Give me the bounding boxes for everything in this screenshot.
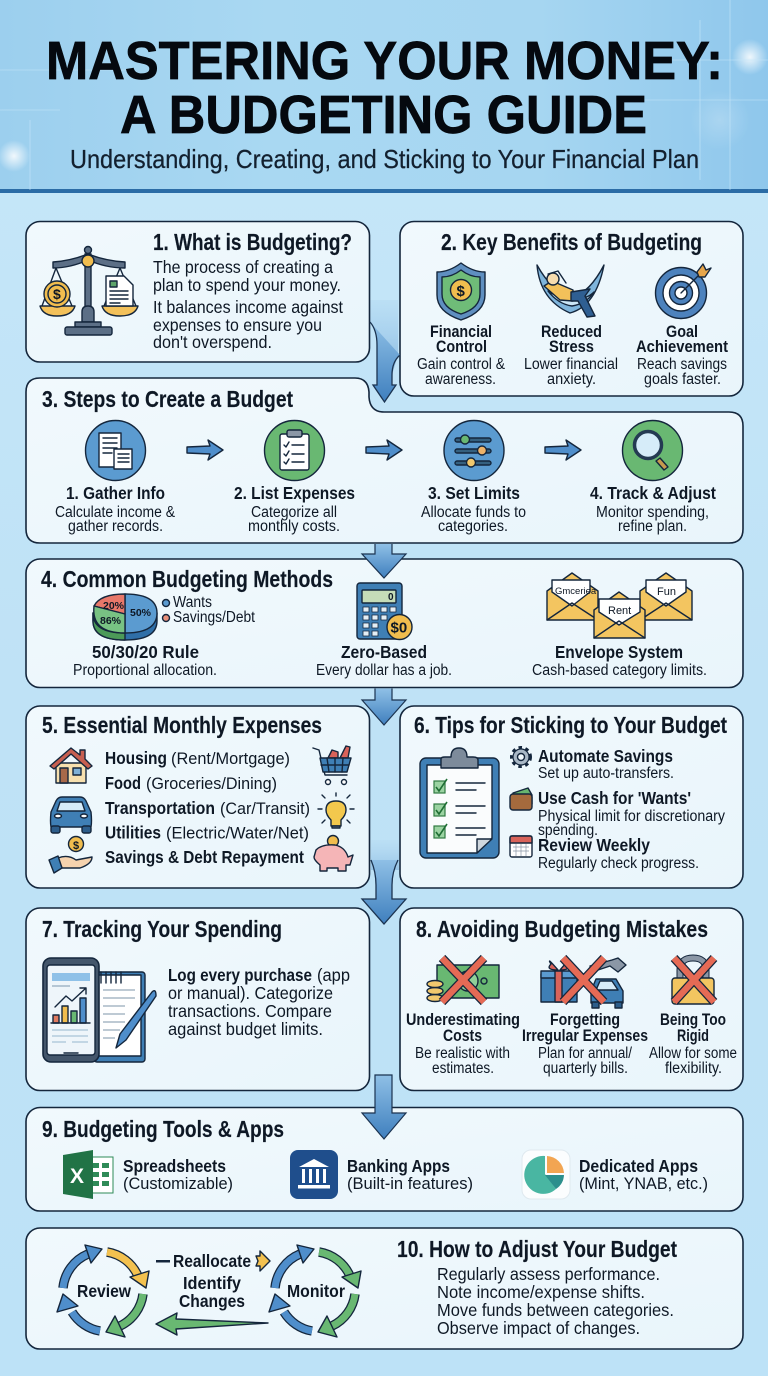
text block: It balances income against <box>153 297 343 317</box>
text block: (app <box>317 965 350 985</box>
text block: or manual). Categorize <box>168 983 333 1003</box>
benefit: reduced stress: Reduced <box>541 322 602 341</box>
mistake: forgetting irregular: quarterly bills. <box>543 1060 628 1077</box>
heading: 8. Avoiding Budgeting Mistakes <box>416 916 708 942</box>
icon: hammock <box>537 265 604 317</box>
connector swoosh: gap above arrow 5-6 to 7-8 <box>371 840 399 870</box>
mistake: underestimating: Costs <box>443 1026 482 1045</box>
benefit: financial control: awareness. <box>425 371 496 388</box>
title: A BUDGETING GUIDE <box>120 85 647 145</box>
icon: wallet <box>510 788 532 810</box>
icon: crossed-out padlock <box>672 958 714 1004</box>
tool: dedicated apps: Dedicated Apps <box>579 1156 698 1176</box>
panel: tips for sticking <box>400 706 743 888</box>
subtitle: Understanding, Creating, and Sticking to Your Financial Plan <box>70 144 699 174</box>
icon: clipboard <box>420 748 499 858</box>
icon: review cycle: Review <box>77 1281 131 1301</box>
icon: shield <box>437 263 485 320</box>
tip: automate savings <box>538 746 674 782</box>
benefit: reduced stress: anxiety. <box>547 371 596 388</box>
expense rows <box>105 748 310 867</box>
label: identify changes: Changes <box>179 1291 245 1311</box>
title <box>46 31 723 145</box>
icon: piggy bank <box>314 836 353 871</box>
benefit: financial control: Financial <box>430 322 492 341</box>
heading: 9. Budgeting Tools & Apps <box>42 1116 284 1142</box>
method: envelope system: Envelope System <box>555 642 683 662</box>
panel: tracking your spending <box>26 908 370 1090</box>
text block: Observe impact of changes. <box>437 1318 640 1338</box>
step: set limits: categories. <box>438 518 508 535</box>
method: envelope system <box>532 642 707 679</box>
text block: Move funds between categories. <box>437 1300 674 1320</box>
tip: review weekly: Review Weekly <box>538 835 650 855</box>
benefit: goal achievement: Goal <box>666 322 698 341</box>
step: track and adjust: Monitor spending, <box>596 504 709 521</box>
icon: crossed-out money <box>427 958 499 1002</box>
arrow: methods to expenses <box>362 688 406 725</box>
icon: spreadsheet: X <box>70 1165 84 1188</box>
icon: review cycle <box>57 1245 149 1337</box>
mistake: too rigid <box>649 1010 737 1077</box>
mistake: underestimating: Be realistic with <box>415 1045 510 1062</box>
expense rows: Savings & Debt Repayment <box>105 847 304 867</box>
benefit: financial control: Control <box>436 337 487 356</box>
icon: house <box>50 748 92 783</box>
mistake: underestimating: estimates. <box>432 1060 494 1077</box>
panel: common budgeting methods <box>26 559 743 688</box>
step: gather info <box>55 483 176 535</box>
expense rows: Transportation <box>105 798 215 818</box>
step: list expenses: monthly costs. <box>248 518 340 535</box>
panel: avoiding mistakes <box>400 908 743 1090</box>
step arrow <box>545 440 581 460</box>
method: zero-based: Zero-Based <box>341 642 427 662</box>
heading: 10. How to Adjust Your Budget <box>397 1236 677 1262</box>
method: envelope system: Cash-based category limits. <box>532 662 707 679</box>
text block <box>153 257 343 352</box>
arrow: monitor back to review <box>156 1313 268 1335</box>
text block <box>437 1264 674 1338</box>
panel: what is budgeting <box>26 222 370 362</box>
mistake: forgetting irregular: Plan for annual/ <box>538 1045 633 1062</box>
method: 50/30/20: 50/30/20 Rule <box>92 642 199 662</box>
connector swoosh: sections 1-2 to 3 <box>370 300 398 385</box>
tool: spreadsheets: Spreadsheets <box>123 1156 226 1176</box>
icon: bank <box>290 1150 338 1199</box>
step: track and adjust: refine plan. <box>618 518 687 535</box>
method: zero-based <box>316 642 452 679</box>
tool: spreadsheets <box>123 1156 233 1193</box>
icon: dedicated app <box>522 1150 570 1199</box>
benefit: reduced stress <box>524 322 618 388</box>
benefit: goal achievement: Achievement <box>636 337 728 356</box>
text block: Note income/expense shifts. <box>437 1282 645 1302</box>
expense rows: (Groceries/Dining) <box>146 774 277 793</box>
benefit: reduced stress: Stress <box>549 337 594 356</box>
mistake: underestimating: Underestimating <box>406 1010 520 1029</box>
icon: pie chart <box>93 594 157 640</box>
mistake: forgetting irregular: Irregular Expenses <box>522 1026 648 1045</box>
icon: envelopes: Gmceriea <box>555 586 597 597</box>
heading: 2. Key Benefits of Budgeting <box>441 229 702 255</box>
icon: calculator <box>357 583 412 640</box>
mistake: too rigid: Allow for some <box>649 1045 737 1062</box>
step: set limits: 3. Set Limits <box>428 483 520 503</box>
icon: calendar <box>510 836 532 857</box>
expense rows: (Electric/Water/Net) <box>166 824 309 842</box>
heading: 1. What is Budgeting? <box>153 229 352 255</box>
icon: track and adjust <box>622 420 682 480</box>
icon: balance scale <box>40 246 138 335</box>
arrow: steps to methods <box>362 544 406 578</box>
step: gather info: Calculate income & <box>55 504 176 521</box>
icon: calculator: 0 <box>388 592 394 603</box>
expense rows: (Rent/Mortgage) <box>171 749 290 768</box>
icon: hand with coin: $ <box>73 840 79 852</box>
text block: Log every purchase <box>168 965 312 985</box>
benefit: goal achievement <box>636 322 728 388</box>
heading: 4. Common Budgeting Methods <box>41 566 333 592</box>
tip: use cash: spending. <box>538 822 598 839</box>
label: reallocate: Reallocate <box>173 1251 251 1271</box>
legend <box>162 594 256 626</box>
tip: review weekly: Regularly check progress. <box>538 855 699 872</box>
text block: expenses to ensure you <box>153 315 322 335</box>
icon: calculator: $0 <box>390 620 407 636</box>
step: track and adjust: 4. Track & Adjust <box>590 483 716 503</box>
tip: automate savings: Set up auto-transfers. <box>538 765 674 782</box>
legend: Savings/Debt <box>173 609 256 626</box>
tip: review weekly <box>538 835 699 872</box>
step: set limits <box>421 483 526 535</box>
panel: essential monthly expenses <box>26 706 370 888</box>
tool: banking apps: Banking Apps <box>347 1156 450 1176</box>
icon: pie chart: 50% <box>130 607 152 619</box>
mistake: underestimating <box>406 1010 520 1077</box>
arrow: tracking to tools <box>362 1075 406 1139</box>
panel: key benefits <box>400 222 743 396</box>
method: zero-based: Every dollar has a job. <box>316 662 452 679</box>
legend: Wants <box>173 594 212 611</box>
benefit: goal achievement: Reach savings <box>637 356 727 373</box>
arrow: expenses to tracking <box>362 860 406 924</box>
icon: pie chart: 86% <box>100 615 122 627</box>
header banner <box>0 0 768 193</box>
tool: dedicated apps: (Mint, YNAB, etc.) <box>579 1174 708 1193</box>
method: 50/30/20 <box>73 642 217 679</box>
label: identify changes: Identify <box>183 1273 241 1293</box>
mistake: too rigid: Being Too <box>660 1010 726 1029</box>
icon: monitor cycle: Monitor <box>287 1281 345 1301</box>
label: identify changes <box>179 1273 245 1311</box>
icon: light bulb <box>318 793 354 828</box>
tool: spreadsheets: (Customizable) <box>123 1174 233 1193</box>
benefit: financial control: Gain control & <box>417 356 506 373</box>
expense rows: (Car/Transit) <box>220 799 310 818</box>
mistake: too rigid: flexibility. <box>665 1060 722 1077</box>
step: list expenses: 2. List Expenses <box>234 483 355 503</box>
icon: envelopes <box>547 573 692 638</box>
tip: use cash <box>538 788 725 839</box>
tip: use cash: Use Cash for 'Wants' <box>538 788 691 808</box>
step arrow <box>187 440 223 460</box>
expense rows: Food <box>105 773 141 793</box>
tool: banking apps <box>347 1156 473 1193</box>
panel: steps to create a budget <box>26 378 743 543</box>
mistake: forgetting irregular <box>522 1010 648 1077</box>
icon: envelopes: Rent <box>608 605 631 617</box>
heading: 5. Essential Monthly Expenses <box>42 712 322 738</box>
icon: spreadsheet <box>63 1150 113 1199</box>
text block: transactions. Compare <box>168 1001 332 1021</box>
step: list expenses <box>234 483 355 535</box>
step: gather info: 1. Gather Info <box>66 483 165 503</box>
icon: phone and notebook <box>43 958 156 1062</box>
benefit: reduced stress: Lower financial <box>524 356 618 373</box>
tool: dedicated apps <box>579 1156 708 1193</box>
text block: The process of creating a <box>153 257 333 277</box>
step: set limits: Allocate funds to <box>421 504 526 521</box>
step arrow <box>366 440 402 460</box>
icon: envelopes: Fun <box>657 586 676 598</box>
heading: 3. Steps to Create a Budget <box>42 386 293 412</box>
step: list expenses: Categorize all <box>251 504 337 521</box>
icon: crossed-out gift, car and wrench <box>541 958 626 1008</box>
text block: don't overspend. <box>153 332 272 352</box>
heading: 7. Tracking Your Spending <box>42 916 282 942</box>
icon: list expenses <box>264 420 324 480</box>
connector arrow: sections 1-2 to 3 <box>370 322 400 402</box>
icon: shopping cart <box>313 746 351 784</box>
benefit: financial control <box>417 322 506 388</box>
title: MASTERING YOUR MONEY: <box>46 31 723 91</box>
mistake: forgetting irregular: Forgetting <box>550 1010 620 1029</box>
mistake: too rigid: Rigid <box>677 1026 709 1045</box>
panel: how to adjust <box>26 1228 743 1349</box>
method: 50/30/20: Proportional allocation. <box>73 662 217 679</box>
step: track and adjust <box>590 483 716 535</box>
expense rows: Utilities <box>105 822 161 842</box>
text block <box>168 965 350 1039</box>
panel: budgeting tools <box>26 1108 743 1211</box>
icon: pie chart: 20% <box>103 600 125 612</box>
text block: Regularly assess performance. <box>437 1264 660 1284</box>
icon: car <box>50 797 92 833</box>
icon: shield: $ <box>456 283 466 300</box>
icon: set limits <box>444 420 504 480</box>
text block: plan to spend your money. <box>153 275 341 295</box>
tip: use cash: Physical limit for discretionary <box>538 808 725 825</box>
step: gather info: gather records. <box>68 518 163 535</box>
benefit: goal achievement: goals faster. <box>644 371 721 388</box>
icon: hand with coin <box>49 836 92 873</box>
icon: gear <box>512 748 530 766</box>
tip: automate savings: Automate Savings <box>538 746 673 766</box>
icon: balance scale: $ <box>53 286 61 302</box>
icon: target <box>656 264 711 318</box>
tool: banking apps: (Built-in features) <box>347 1174 473 1193</box>
icon: monitor cycle <box>269 1245 361 1337</box>
text block: against budget limits. <box>168 1019 323 1039</box>
expense rows: Housing <box>105 748 167 768</box>
icon: gather info <box>86 420 146 480</box>
